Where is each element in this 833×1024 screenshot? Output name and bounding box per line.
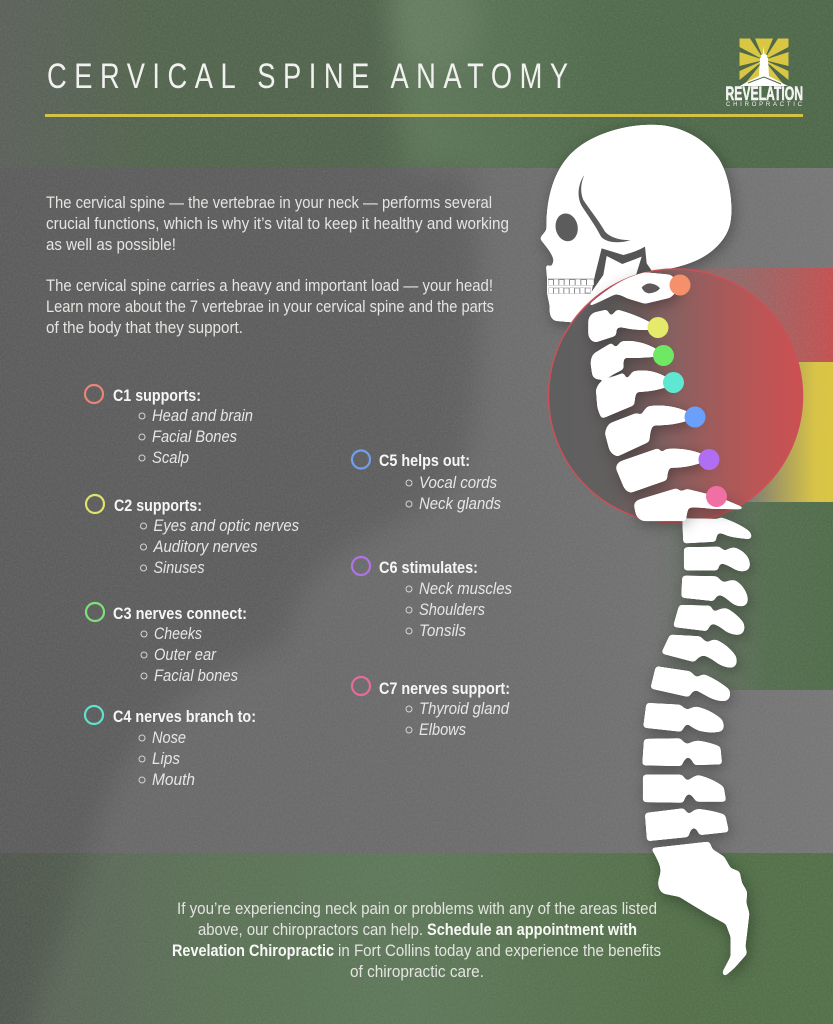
vertebra C6 [617, 449, 709, 492]
skull: teeth [548, 279, 594, 294]
list: C4: C4 nerves branch to: [113, 708, 256, 726]
lower spine [643, 518, 751, 975]
list: C4: Nose [152, 729, 186, 747]
list: C6: C6 stimulates: [379, 559, 478, 577]
vertebra C5 [606, 407, 695, 455]
list: C4: Mouth [152, 771, 195, 789]
background: x-ray silhouette [0, 0, 478, 1024]
closing text: Schedule an appointment with [427, 921, 637, 939]
skull: cheek gap [592, 247, 652, 292]
vertebra C1 [589, 273, 681, 305]
right band: red [660, 268, 833, 362]
intro text: Learn more about the 7 vertebrae in your cervical spine and the parts [46, 298, 494, 316]
list: C7: Thyroid gland [419, 700, 510, 718]
vertebra C1 foramen [642, 283, 660, 293]
list: C1: Scalp [152, 449, 189, 467]
list: C1: C1 supports: [113, 387, 201, 405]
list: C5: Neck glands [419, 495, 501, 513]
dot C4 [663, 372, 684, 393]
intro text: The cervical spine carries a heavy and important load — your head! [46, 277, 493, 295]
cervical vertebrae [589, 273, 743, 520]
right band: green [650, 502, 833, 690]
closing text [172, 900, 661, 981]
title underline [45, 114, 803, 117]
closing text: of chiropractic care. [350, 963, 484, 981]
skull: temporal line [579, 175, 631, 242]
list: C5: Vocal cords [419, 474, 497, 492]
intro text [46, 194, 509, 337]
dot C1 [670, 274, 690, 296]
background: middle grey band [0, 168, 833, 853]
vertebra C4 [597, 371, 673, 417]
list: C5 [352, 450, 501, 513]
list: C3: C3 nerves connect: [113, 605, 247, 623]
list: C4 [85, 706, 256, 789]
marker dots [648, 274, 727, 507]
intro text: crucial functions, which is why it’s vital to keep it healthy and working [46, 215, 509, 233]
closing text: in Fort Collins today and experience the benefits [338, 942, 661, 960]
logo: lighthouse [740, 46, 788, 86]
list: C5: C5 helps out: [379, 452, 470, 470]
skull: details [548, 175, 652, 294]
intro text: of the body that they support. [46, 319, 243, 337]
closing text: If you’re experiencing neck pain or problems with any of the areas listed [177, 900, 657, 918]
list: C1: Head and brain [152, 407, 253, 425]
skull: eye socket [553, 211, 580, 243]
skull [540, 125, 731, 322]
list: C6: Neck muscles [419, 580, 512, 598]
background: top green band [0, 0, 833, 168]
list: C6 [352, 557, 512, 640]
list: C2: Auditory nerves [153, 538, 258, 556]
closing text: above, our chiropractors can help. [198, 921, 423, 939]
background: bottom green band [0, 853, 833, 1024]
intro text: The cervical spine — the vertebrae in your neck — performs several [46, 194, 492, 212]
list: C1: Facial Bones [152, 428, 237, 446]
list: C2: Sinuses [154, 559, 204, 577]
list: C7: Elbows [419, 721, 466, 739]
logo: tagline: CHIROPRACTIC [726, 102, 803, 108]
list: C3: Facial bones [154, 667, 238, 685]
list: C2: Eyes and optic nerves [154, 517, 299, 535]
list: C1 [85, 385, 253, 467]
title: CERVICAL SPINE ANATOMY [47, 57, 568, 96]
vertebra C2 [589, 311, 658, 341]
dot C5 [684, 406, 706, 428]
list: C3: Outer ear [154, 646, 217, 664]
list: C7: C7 nerves support: [379, 680, 510, 698]
skull: cranium and jaw [540, 125, 731, 322]
dot C3 [653, 345, 674, 366]
logo: yellow sunburst [740, 38, 788, 85]
closing text: Revelation Chiropractic [172, 942, 334, 960]
vertebra C3 [592, 342, 663, 379]
dot C2 [648, 317, 668, 338]
dot C7 [706, 486, 727, 507]
list: C6: Tonsils [419, 622, 466, 640]
background: top light patch [390, 0, 480, 75]
list: C2 [86, 495, 299, 577]
list: C3: Cheeks [154, 625, 202, 643]
list: C3 [86, 603, 247, 685]
list: C4: Lips [152, 750, 180, 768]
list: C6: Shoulders [419, 601, 485, 619]
vertebra C7 [635, 489, 743, 520]
list: C7 [352, 677, 510, 739]
dot C6 [698, 449, 720, 470]
list: C2: C2 supports: [114, 497, 202, 515]
highlight circle [548, 269, 802, 523]
right band: yellow [745, 362, 833, 502]
intro text: as well as possible! [46, 236, 176, 254]
logo [726, 38, 803, 108]
